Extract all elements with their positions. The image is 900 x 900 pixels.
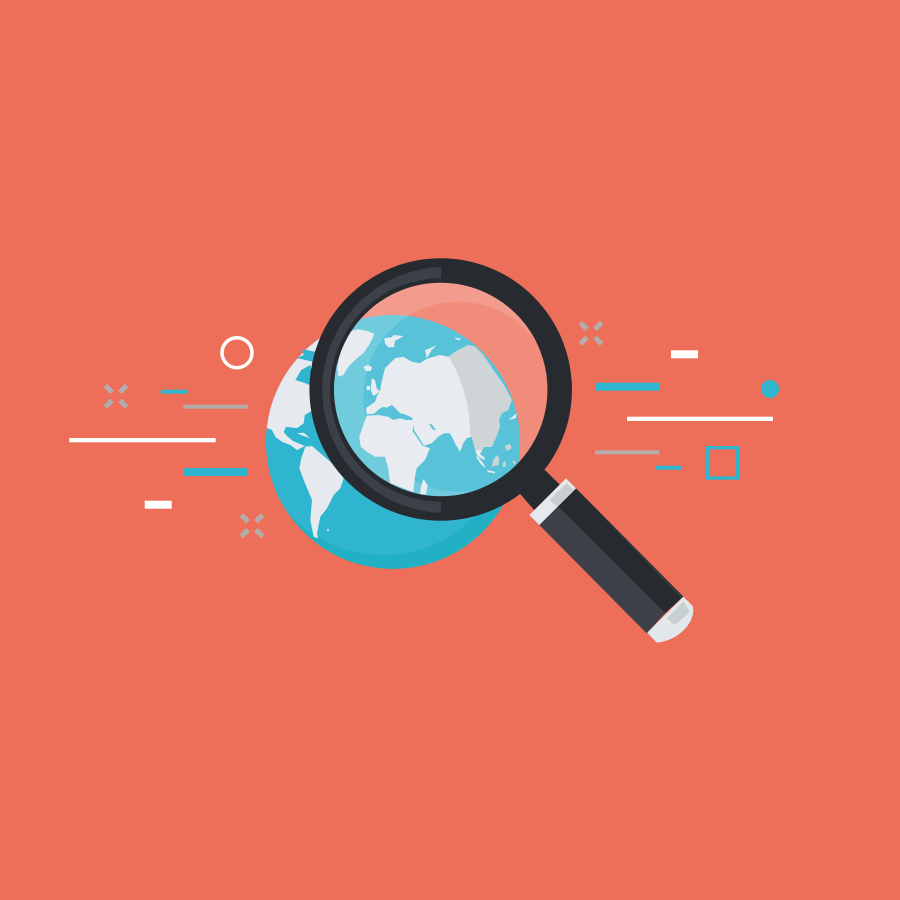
- handle light side: [539, 507, 665, 633]
- svalbard: [455, 338, 461, 340]
- end cap: [647, 597, 693, 643]
- ring outline: [222, 338, 252, 368]
- collar: [529, 478, 576, 525]
- new guinea: [512, 461, 516, 465]
- illustration: magnifying glass over globe: [69, 258, 779, 643]
- sumatra: [477, 455, 486, 468]
- gray line: [183, 405, 248, 409]
- gray cross lower: [240, 513, 264, 538]
- greenland: [337, 329, 374, 377]
- gray cross upper left: [104, 384, 128, 409]
- ring highlight: [322, 267, 441, 513]
- lens highlight crescent: [334, 282, 553, 497]
- north america: [266, 338, 320, 450]
- uk: [371, 378, 380, 396]
- japan: [508, 413, 517, 420]
- end cap shade: [667, 602, 690, 625]
- white line: [627, 417, 773, 421]
- cuba: [297, 433, 310, 438]
- sulawesi: [503, 462, 506, 467]
- eurasia shaded side: [448, 345, 512, 450]
- ocean in lens: [334, 315, 520, 496]
- hudson bay: [295, 365, 314, 387]
- ocean: [266, 338, 504, 569]
- africa: [359, 415, 430, 492]
- eurasia: [366, 345, 512, 460]
- java: [487, 470, 495, 473]
- iceland: [384, 335, 403, 347]
- falkland dot: [327, 529, 329, 531]
- white line: [69, 438, 216, 442]
- continents in lens: [337, 329, 517, 494]
- teal square outline: [707, 448, 737, 478]
- gray line: [595, 450, 659, 454]
- handle dark edge: [574, 486, 683, 599]
- teal dash: [161, 390, 188, 394]
- collar shade: [549, 483, 574, 507]
- handle dark side: [558, 488, 683, 613]
- lens ring: [322, 270, 560, 508]
- teal dash: [655, 466, 682, 470]
- right decorations: [579, 321, 779, 478]
- handle: [517, 470, 693, 643]
- white bar: [145, 501, 172, 509]
- persian gulf: [429, 424, 436, 430]
- white bar: [671, 350, 698, 358]
- lens tint: [334, 282, 548, 496]
- teal dot: [761, 380, 779, 398]
- lens base: [334, 315, 520, 496]
- arctic waters: [297, 350, 316, 362]
- small northern island: [363, 365, 372, 371]
- ireland: [367, 386, 370, 390]
- teal bar: [183, 468, 248, 476]
- borneo: [492, 455, 499, 467]
- philippines: [505, 444, 512, 451]
- gray cross upper right: [579, 321, 603, 346]
- south america: [299, 446, 344, 538]
- magnifying glass lens view: [334, 282, 548, 496]
- magnifying glass ring and handle: [322, 267, 693, 643]
- novaya zemlya: [425, 345, 437, 358]
- neck: [517, 470, 567, 517]
- left decorations: [69, 338, 264, 538]
- globe: [266, 338, 504, 569]
- teal bar: [595, 383, 659, 391]
- madagascar: [420, 479, 428, 494]
